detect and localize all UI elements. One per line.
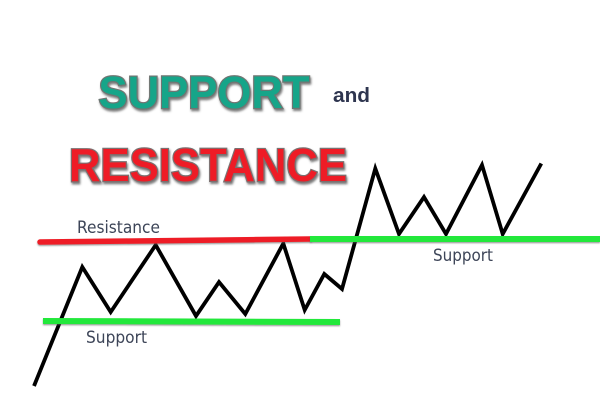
- resistance line: [40, 239, 310, 242]
- label: Support left: Support: [86, 328, 147, 347]
- label: Resistance: Resistance: [77, 218, 160, 237]
- label: Support right: Support: [433, 246, 493, 265]
- price line: [34, 164, 541, 386]
- title: and: and: [333, 85, 370, 107]
- title: RESISTANCE: RESISTANCE: [69, 139, 347, 191]
- right support line: [310, 236, 600, 242]
- left support line: [43, 321, 340, 322]
- title: SUPPORT: SUPPORT: [98, 67, 310, 118]
